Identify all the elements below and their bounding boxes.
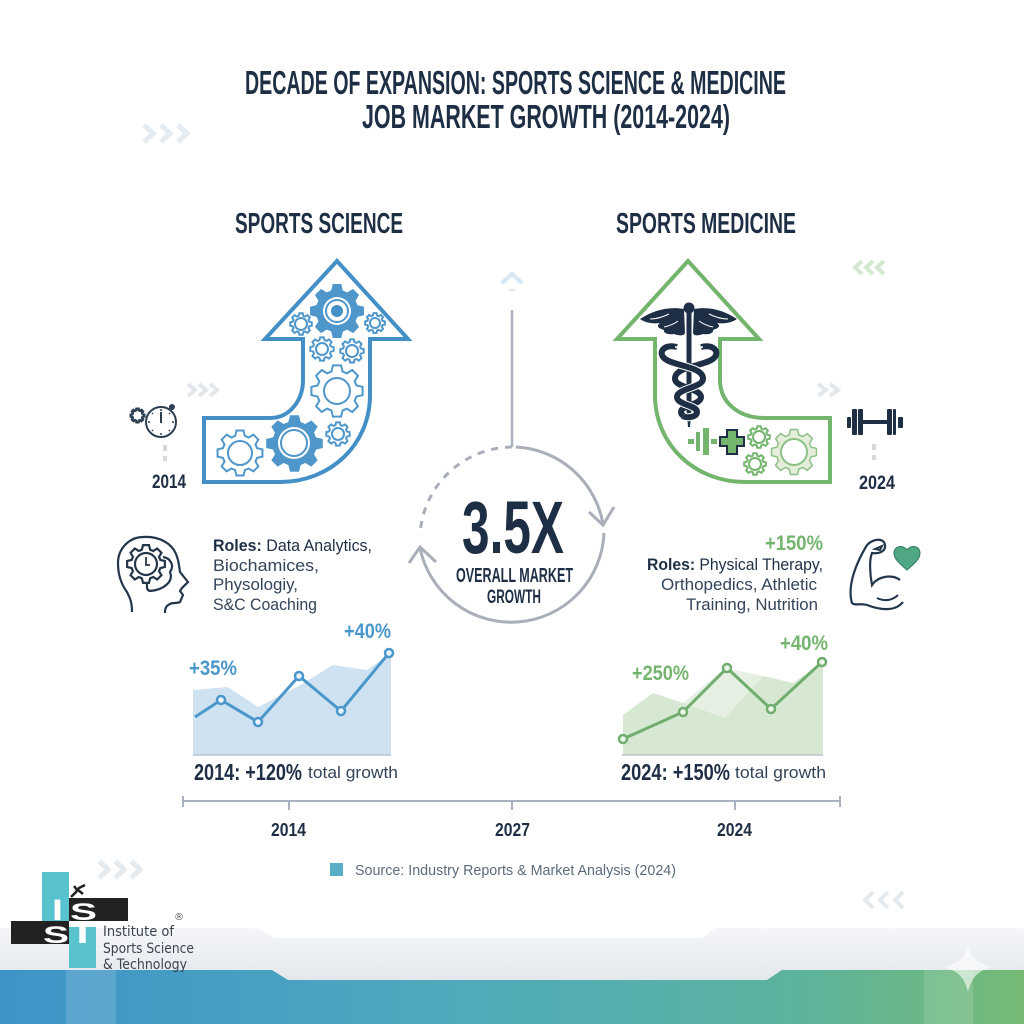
chart: sports science growth [189,620,393,755]
gear: bottom left outline [218,431,262,475]
decorative chevrons [99,125,903,908]
connector dashes 2014 [163,445,167,461]
timeline labels: 2027 [495,820,530,840]
caption: 2014 total growth [194,759,398,785]
gear: bottom solid [266,415,323,472]
label: +40%: +40% [344,620,391,643]
small gears [290,313,385,446]
label: +35%: +35% [189,657,237,680]
logo wordmark: ® [174,912,184,923]
timeline labels: 2024 [717,820,752,840]
caption: 2014 total growth: total growth [308,763,398,782]
callout: 3.5X overall market growth: GROWTH [487,587,541,608]
logo wordmark: Sports Science [103,941,194,957]
caption: 2024 total growth: total growth [735,763,826,782]
connector dashes 2024 [872,444,876,460]
label: +250%: +250% [632,662,689,685]
gear: top large [310,284,364,338]
label: +40%: +40% [780,632,828,655]
stat: +150%: +150% [765,532,823,555]
text: sports science roles: Biochamices, [213,556,319,575]
central vertical line [511,310,513,447]
callout: 3.5X overall market growth [456,486,573,608]
text: sports medicine roles: Orthopedics, Athletic [661,575,817,594]
logo letters [43,894,97,950]
icon: stopwatch with gear [131,404,176,437]
logo runner [71,885,85,897]
green growth arrow with caduceus [617,261,830,482]
icon: green dumbbell [688,428,717,455]
text: sports medicine roles [647,555,823,614]
chart: sports medicine growth [619,632,828,755]
text: sports science roles: S&C Coaching [213,595,317,614]
logo: institute of sports science and technology [11,872,194,973]
caption: 2024 total growth [621,759,826,785]
gear: medium outline [311,365,363,417]
footer band [0,928,1024,1024]
logo wordmark: & Technology [103,957,187,973]
icon: head with gear and clock [118,537,188,613]
icon: green cross [720,430,744,454]
heading: sports medicine: SPORTS MEDICINE [616,208,796,240]
timeline labels: 2014 [271,820,306,840]
growth cycle arrows [409,447,614,622]
timeline labels [271,820,752,840]
text: sports medicine roles: Roles: Physical Therapy, [647,555,823,574]
label: 2024: 2024 [859,473,895,494]
title: JOB MARKET GROWTH (2014-2024) [362,98,730,135]
heading: sports science: SPORTS SCIENCE [235,208,403,240]
logo wordmark: Institute of [103,924,175,940]
logo letters: T [69,917,96,950]
logo wordmark [103,912,194,973]
callout: 3.5X overall market growth: 3.5X [462,486,564,569]
icon: dumbbell [847,409,903,435]
label: 2014: 2014 [152,472,186,493]
caption: 2024 total growth: 2024: +150% [621,759,730,785]
logo letters: S [43,922,69,949]
text: sports science roles: Roles: Data Analytics, [213,536,372,555]
timeline [183,796,840,840]
text: sports science roles: Physologiy, [213,575,298,594]
blue growth arrow with gears [204,261,408,482]
logo letters: S [70,899,97,926]
icon: caduceus [640,302,737,427]
icon: flexed arm and heart [851,540,920,609]
text: sports science roles [213,536,372,614]
text: sports medicine roles: Training, Nutrition [686,595,818,614]
gears [744,426,816,475]
title [245,64,786,135]
logo letters: I [52,894,63,927]
callout: 3.5X overall market growth: OVERALL MARKET [456,565,573,587]
caption: 2014 total growth: 2014: +120% [194,759,302,785]
source note: Source: Industry Reports & Market Analysis (2024) [355,862,676,879]
